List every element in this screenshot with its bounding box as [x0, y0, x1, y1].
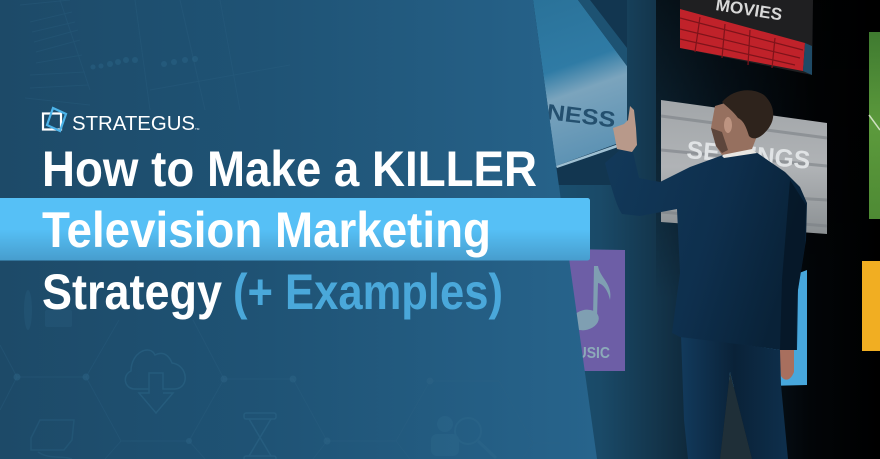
panel: business screen — [530, 0, 627, 185]
icon: music note — [569, 266, 610, 333]
hexagon network background — [0, 0, 560, 459]
trousers — [681, 335, 788, 459]
panel: orange screen — [862, 261, 880, 351]
beard shade — [711, 128, 728, 153]
upper room shade — [656, 0, 880, 300]
logo — [43, 108, 200, 135]
title line 2: Television Marketing — [42, 202, 491, 258]
raised hand — [613, 106, 637, 152]
ear — [724, 117, 732, 133]
man's lower hand — [779, 349, 794, 380]
neck and face — [711, 100, 757, 155]
sleeve shadow — [780, 180, 806, 350]
icon: hourglass — [244, 413, 276, 459]
photo background: dark room — [530, 0, 880, 459]
icon: figure with board — [24, 290, 72, 330]
hexagon nodes — [14, 374, 434, 444]
title line 3: Strategy — [42, 264, 222, 320]
panel: movies screen — [680, 0, 813, 75]
panel: settings screen: SETTINGS — [685, 136, 811, 175]
hair — [722, 90, 773, 138]
title accent: (+ Examples) — [233, 264, 503, 320]
panel: settings screen — [661, 100, 827, 234]
dotted line decoration — [90, 56, 198, 70]
shirt collar — [722, 149, 757, 158]
title line 1: How to Make a KILLER — [42, 141, 537, 197]
floor between legs — [720, 372, 752, 459]
panel: blue screen — [729, 270, 807, 387]
icon: person with magnifier — [431, 416, 496, 458]
jacket — [605, 150, 807, 350]
panel: music screen: MUSIC — [565, 345, 610, 362]
highlight bar — [0, 198, 590, 260]
logo: TM — [195, 127, 200, 131]
man seen from behind — [605, 90, 807, 459]
panel: left blue background — [0, 0, 597, 459]
title — [42, 141, 537, 320]
wordmark: STRATEGUS — [72, 112, 195, 135]
panel: music screen — [565, 249, 625, 371]
panel: sports screen — [869, 32, 880, 219]
icon: cloud download — [125, 350, 185, 413]
panel: business screen: NESS — [545, 99, 617, 132]
icon: money in hand — [31, 420, 74, 459]
icon: strategus squares — [43, 108, 66, 131]
building lines — [20, 0, 290, 110]
